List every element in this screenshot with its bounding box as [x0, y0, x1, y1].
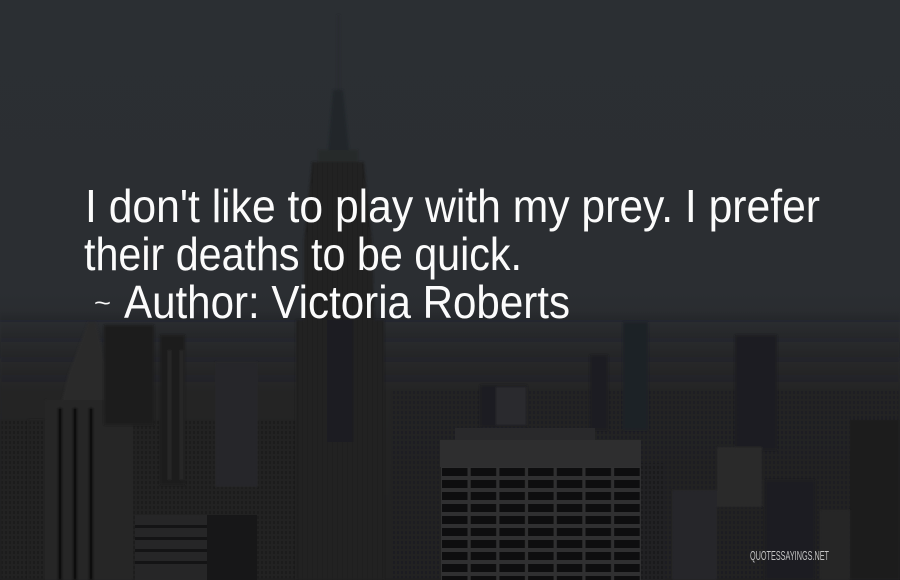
- mid-rise tower: [215, 362, 258, 487]
- quote text: their deaths to be quick.: [84, 228, 522, 280]
- dark tower: [104, 325, 154, 425]
- quote text: [84, 180, 820, 280]
- attribution: ~: [94, 290, 111, 317]
- lower banded building: [135, 515, 257, 580]
- left crowned building: [28, 322, 133, 580]
- attribution: Author: Victoria Roberts: [124, 276, 570, 328]
- watermark: QUOTESSAYINGS.NET: [750, 548, 829, 563]
- distant right towers: [480, 322, 850, 580]
- slim tower: [160, 335, 185, 485]
- quote text: I don't like to play with my prey. I prefer: [85, 180, 820, 232]
- skyline background: [0, 310, 900, 580]
- large foreground building: [440, 428, 665, 580]
- empire state building: [296, 15, 384, 580]
